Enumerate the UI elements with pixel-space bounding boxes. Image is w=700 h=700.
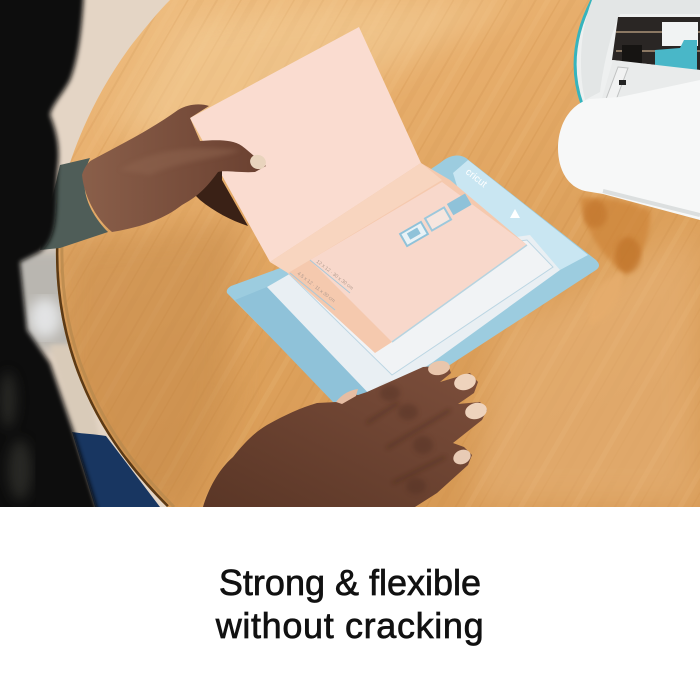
wooden table top xyxy=(0,0,700,507)
cutting mat xyxy=(227,156,599,426)
machine: cutting machine xyxy=(558,0,700,220)
transfer sheet lower part xyxy=(270,163,527,353)
caption heading: Strong & flexible xyxy=(219,562,481,603)
mat brand text: cricut xyxy=(463,167,489,190)
photo: hands lifting transfer sheet from cutting mat on a wooden table xyxy=(0,0,700,507)
sleeve xyxy=(40,158,108,250)
arrow mark on mat xyxy=(510,209,520,218)
white carrier sheet xyxy=(267,235,560,400)
floor background xyxy=(0,0,700,507)
table rim xyxy=(56,245,167,507)
cut shape icons xyxy=(400,193,472,246)
sheet guide lines xyxy=(290,260,350,310)
jeans xyxy=(72,432,160,507)
transfer sheet lower part: 4.5 x 12 · 11 x 30 cm xyxy=(296,271,336,304)
dark hair foreground xyxy=(0,0,100,517)
grey hair highlights xyxy=(0,372,32,500)
finger gaps xyxy=(367,403,450,483)
lower hand xyxy=(203,359,489,507)
light panel of the mat xyxy=(453,160,588,270)
upper hand xyxy=(82,104,268,232)
transfer sheet lower part: 12 x 12 · 30 x 30 cm xyxy=(315,259,354,291)
fingernails xyxy=(427,359,451,377)
lifted sheet flap xyxy=(190,27,421,262)
caption heading: without cracking xyxy=(216,605,484,646)
caption heading xyxy=(215,562,484,646)
wood knot xyxy=(580,197,650,275)
darker left band of the mat xyxy=(235,287,375,402)
